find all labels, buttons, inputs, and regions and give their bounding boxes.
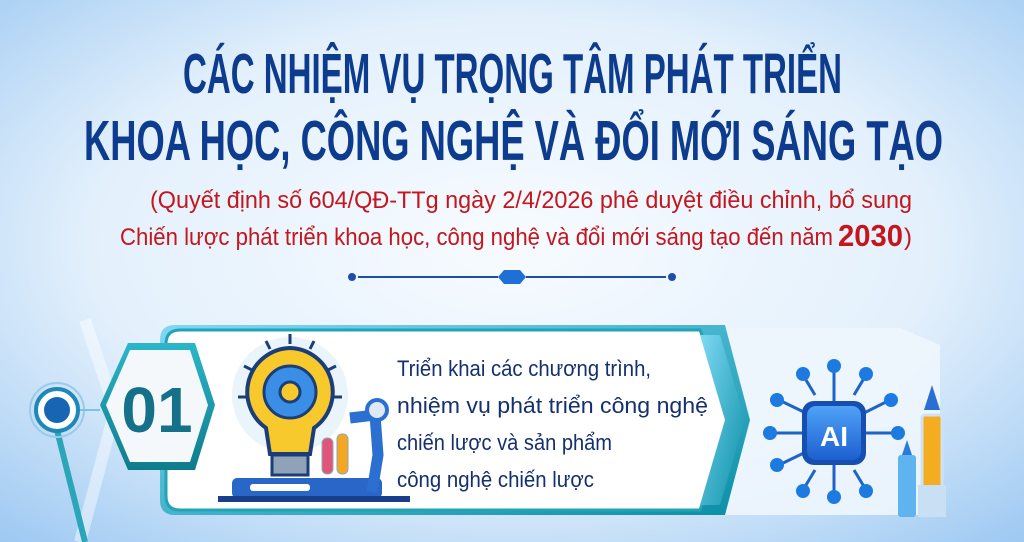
text block: chiến lược và sản phẩm <box>397 430 612 455</box>
icon: lightbulb with gear and robot arm <box>218 334 410 502</box>
icon: AI chip: AI <box>820 421 848 452</box>
text block: Triển khai các chương trình, <box>397 356 651 381</box>
subtitle: 2030 <box>838 218 903 253</box>
icon: test tubes / rocket <box>898 385 946 517</box>
title <box>84 41 943 173</box>
subtitle: Chiến lược phát triển khoa học, công nghệ và đổi mới sáng tạo đến năm <box>120 224 833 251</box>
hexagon number: 01 <box>121 374 193 446</box>
subtitle: ) <box>904 224 912 251</box>
panel: right light <box>640 328 940 515</box>
hexagon number <box>100 343 215 470</box>
icon: AI chip <box>763 359 905 504</box>
text block <box>397 356 708 492</box>
text block: công nghệ chiến lược <box>397 467 594 492</box>
subtitle <box>120 187 912 253</box>
subtitle: (Quyết định số 604/QĐ-TTg ngày 2/4/2026 phê duyệt điều chỉnh, bổ sung <box>150 187 912 214</box>
divider <box>348 270 676 284</box>
node circle <box>30 383 100 437</box>
text block: nhiệm vụ phát triển công nghệ <box>397 393 708 418</box>
panel: main <box>160 325 750 515</box>
